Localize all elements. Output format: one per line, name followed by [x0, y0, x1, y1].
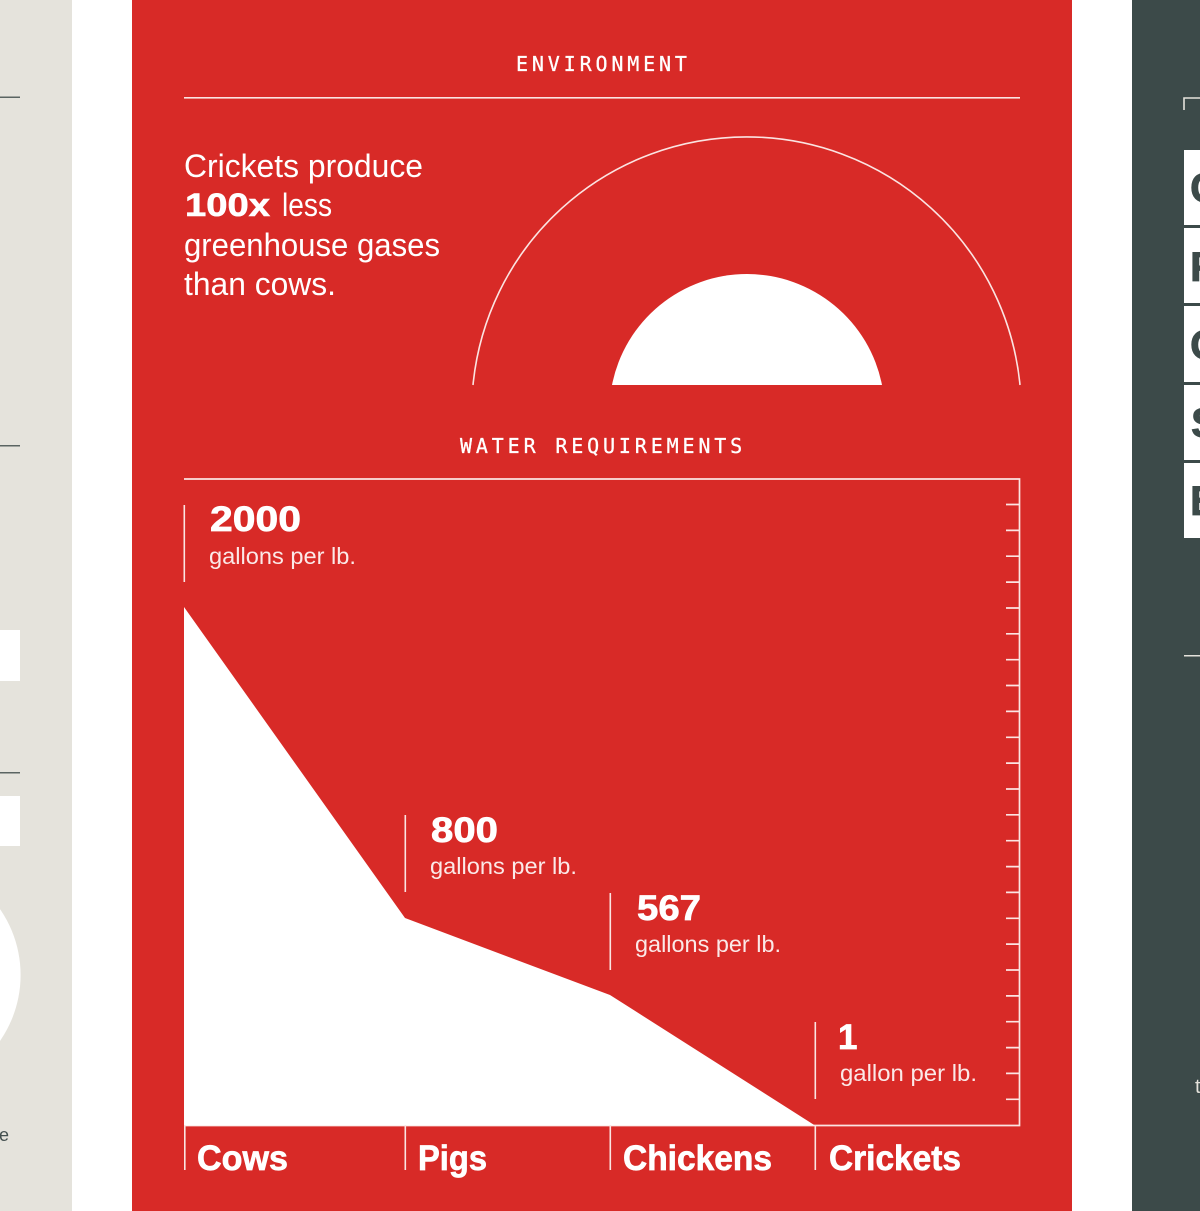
value: crickets: 1: [838, 1018, 857, 1057]
chart: greenhouse gas semicircles: [473, 137, 1020, 385]
value: crickets: [814, 1018, 977, 1099]
category: pigs: Pigs: [418, 1139, 487, 1178]
text block: greenhouse gases statement: less: [282, 187, 332, 223]
value: crickets: gallon per lb.: [840, 1060, 977, 1086]
heading: environment: ENVIRONMENT: [516, 52, 691, 76]
panel: right neighbouring dark panel: [1132, 0, 1200, 1211]
value: pigs: 800: [431, 811, 498, 850]
text block: greenhouse gases statement: Crickets produce: [184, 148, 423, 184]
chart: water requirements area chart: [184, 479, 1020, 1178]
panel: red environment panel: [132, 0, 1072, 1211]
category: crickets: Crickets: [829, 1139, 961, 1178]
value: cows: 2000: [210, 500, 301, 539]
text block: greenhouse gases statement: greenhouse gases: [184, 227, 440, 263]
category: cows: [184, 1125, 288, 1178]
white area: [184, 607, 815, 1126]
value: cows: gallons per lb.: [209, 543, 356, 569]
text block: greenhouse gases statement: 100x: [185, 187, 270, 223]
white letter boxes: [1184, 150, 1200, 538]
category: cows: Cows: [197, 1139, 288, 1178]
value: chickens: [610, 889, 781, 970]
text block: greenhouse gases statement: [184, 148, 440, 302]
value: pigs: gallons per lb.: [430, 853, 577, 879]
category: pigs: [404, 1125, 487, 1178]
chart frame: [184, 479, 1020, 1126]
value: chickens: 567: [637, 889, 701, 928]
text block: greenhouse gases statement: than cows.: [184, 266, 336, 302]
value: pigs: [404, 811, 577, 892]
value: chickens: gallons per lb.: [635, 931, 781, 957]
heading: water requirements: WATER REQUIREMENTS: [460, 434, 746, 458]
panel: left neighbouring beige panel: [0, 0, 72, 1211]
value: cows: [184, 500, 356, 582]
scale ticks: [1006, 504, 1019, 1099]
category: chickens: Chickens: [623, 1139, 772, 1178]
